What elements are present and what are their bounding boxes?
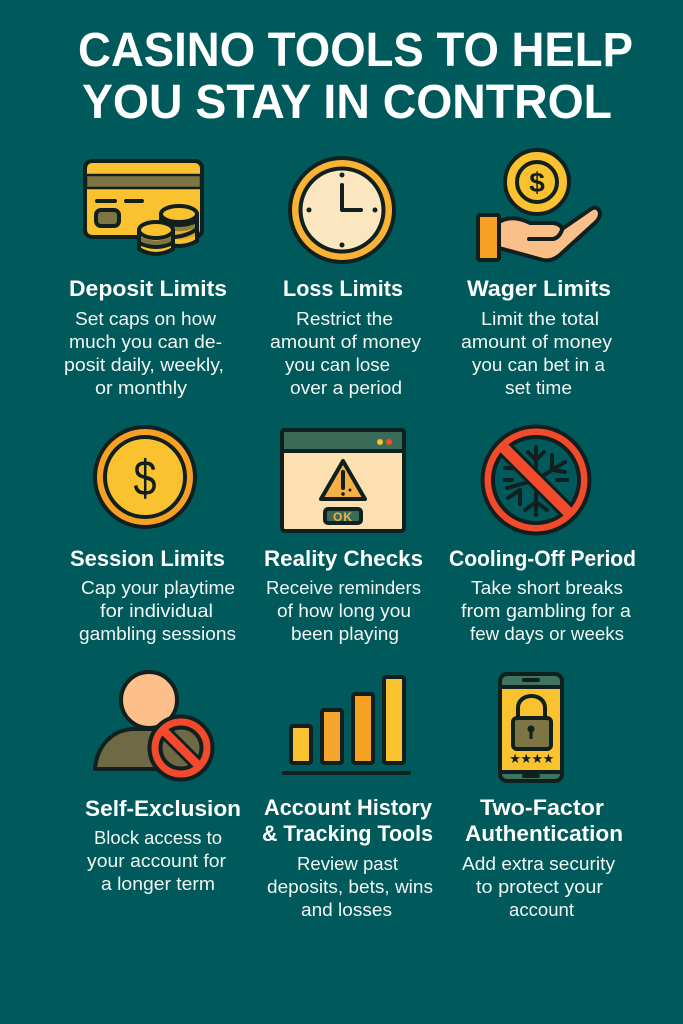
description [462,854,615,920]
description: or monthly [95,378,187,398]
panel: two-factor authentication [462,674,623,920]
description: your account for [87,851,226,871]
description: amount of money [270,332,421,352]
description [270,309,421,398]
description [79,578,236,644]
description: deposits, bets, wins [267,877,433,897]
icon: dollar coin [95,427,195,527]
icon: warning window [282,430,404,531]
description: Review past [297,854,398,874]
title: CASINO TOOLS TO HELP [78,24,633,77]
heading: Account History [264,795,433,820]
description: from gambling for a [461,601,632,621]
description: Receive reminders [266,578,421,598]
description: to protect your [476,877,603,897]
heading: Two-Factor [480,795,604,820]
description: amount of money [461,332,612,352]
description: account [509,900,574,920]
description [266,578,421,644]
description: you can bet in a [472,355,606,375]
description: a longer term [101,874,215,894]
description: posit daily, weekly, [64,355,224,375]
title [78,24,633,129]
icon: bar chart [284,677,409,773]
description [87,828,226,894]
description: much you can de- [69,332,222,352]
description: of how long you [277,601,411,621]
description: few days or weeks [470,624,624,644]
description: Restrict the [296,309,393,329]
description: for individual [100,601,213,621]
description: and losses [301,900,392,920]
panel: loss limits [270,158,421,398]
description: set time [505,378,572,398]
heading: Loss Limits [283,276,403,301]
panel: reality checks [264,430,423,644]
heading: Authentication [465,821,623,846]
icon: hand holding coin: $ [529,167,545,198]
icon: crossed-out snowflake [482,426,590,534]
panel: account history and tracking tools [262,677,433,920]
description: you can lose [285,355,390,375]
description: Take short breaks [471,578,623,598]
description: Cap your playtime [81,578,235,598]
icon: phone with padlock [500,674,562,781]
icon: clock [290,158,394,262]
panel: cooling-off period [449,426,636,644]
description: Set caps on how [75,309,217,329]
heading: Cooling-Off Period [449,546,636,571]
icon: blocked user [95,672,212,780]
heading [262,795,433,846]
panel: self-exclusion [85,672,241,894]
title: YOU STAY IN CONTROL [82,76,612,129]
description: gambling sessions [79,624,236,644]
heading: Session Limits [70,546,225,571]
heading: Self-Exclusion [85,796,241,821]
heading: Deposit Limits [69,276,227,301]
heading: & Tracking Tools [262,821,433,846]
heading: Reality Checks [264,546,423,571]
panel: wager limits [461,150,612,398]
heading: Wager Limits [467,276,611,301]
panel: deposit limits [64,161,227,398]
icon: warning window: OK [333,510,353,524]
description [64,309,224,398]
description: Limit the total [481,309,599,329]
heading [465,795,623,846]
description [267,854,433,920]
icon: dollar coin: $ [134,450,156,506]
panel: session limits [70,427,236,644]
description [461,309,612,398]
icon: hand holding coin [478,150,600,260]
description [461,578,632,644]
icon: credit card and coins [85,161,202,254]
icon: phone with padlock: ★★★★ [509,752,554,767]
description: been playing [291,624,399,644]
description: Add extra security [462,854,615,874]
description: over a period [290,378,402,398]
description: Block access to [94,828,222,848]
